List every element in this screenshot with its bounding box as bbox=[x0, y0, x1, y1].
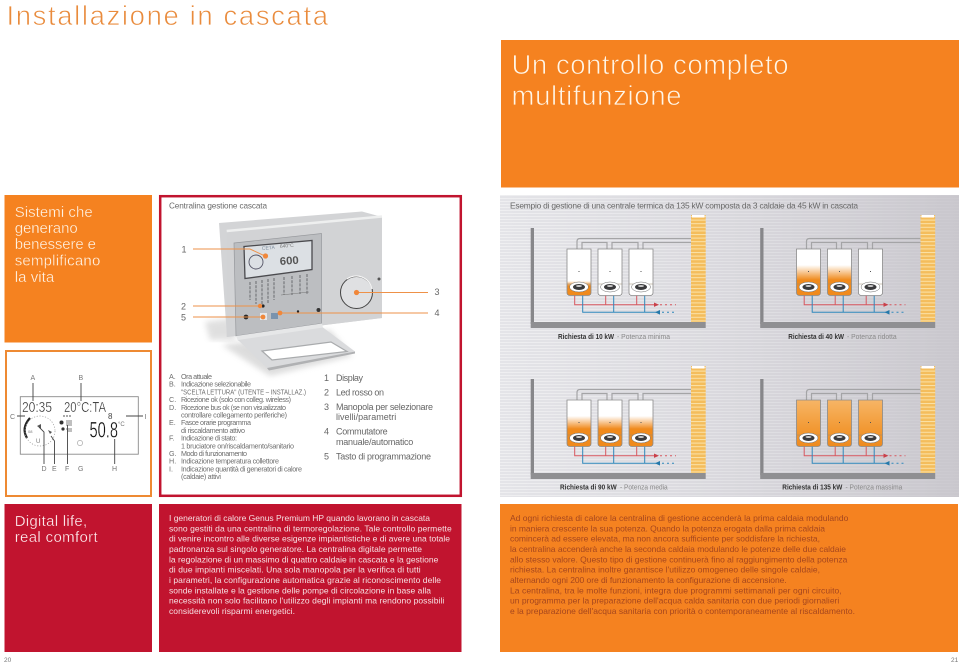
image: controller: 600 bbox=[279, 255, 299, 268]
legend: letters A to I bbox=[169, 372, 306, 481]
legend: letters A to I: di riscaldamento attivo bbox=[181, 426, 245, 435]
LCD callout letters: C bbox=[10, 414, 15, 421]
legend: letters A to I: E. bbox=[169, 418, 176, 427]
legend: letters A to I: F. bbox=[169, 434, 175, 443]
legend: letters A to I: Indicazione di stato: bbox=[181, 434, 237, 443]
heading: slogan: generano bbox=[15, 220, 78, 237]
panel: LCD display diagram bbox=[6, 351, 151, 496]
callouts: numbered leaders: 5 bbox=[181, 312, 186, 322]
panel: red slogan bbox=[4, 504, 152, 652]
panel: cascade schemes bbox=[500, 195, 959, 497]
scheme: 90 kW: Richiesta di 90 kW bbox=[560, 482, 617, 491]
text block: generatori: padronanza sul singolo generatore. La centralina digitale permette bbox=[169, 544, 422, 554]
scheme: 40 kW: Richiesta di 40 kW bbox=[788, 332, 845, 341]
LCD symbols: 08 bbox=[28, 429, 33, 434]
scheme: 40 kW: - Potenza ridotta bbox=[847, 332, 897, 341]
title: Installazione in cascata bbox=[6, 0, 329, 31]
legend: letters A to I: Indicazione temperatura collettore bbox=[181, 457, 279, 466]
scheme: 135 kW: Richiesta di 135 kW bbox=[782, 482, 843, 491]
legend: letters A to I: I. bbox=[169, 464, 173, 473]
scheme: 135 kW bbox=[760, 366, 935, 491]
text block: generatori: considerevoli risparmi energetici. bbox=[169, 606, 295, 616]
scheme: 10 kW: Richiesta di 10 kW bbox=[558, 332, 615, 341]
legend: letters A to I: A. bbox=[169, 372, 176, 381]
legend: letters A to I: C. bbox=[169, 395, 176, 404]
legend: letters A to I: H. bbox=[169, 457, 176, 466]
panel: red body text bbox=[159, 504, 462, 652]
label: controller title: Centralina gestione cascata bbox=[169, 202, 267, 210]
LCD symbols: U bbox=[36, 439, 40, 445]
LCD symbols bbox=[25, 416, 83, 446]
LCD digits: 20:35 bbox=[22, 399, 52, 416]
legend: numbers 1 to 5: 2 bbox=[324, 387, 329, 397]
legend: letters A to I: Ricezione bus ok (se non visualizzato bbox=[181, 403, 286, 412]
legend: letters A to I: Indicazione quantità di generatori di calore bbox=[181, 464, 302, 473]
legend: numbers 1 to 5 bbox=[324, 373, 433, 461]
text block: generatori: di venire incontro alle diverse esigenze impiantistiche e di avere una totale bbox=[169, 534, 450, 544]
scheme: 40 kW bbox=[760, 215, 935, 341]
legend: numbers 1 to 5: 3 bbox=[324, 402, 329, 412]
legend: numbers 1 to 5: Led rosso on bbox=[336, 387, 384, 397]
legend: letters A to I: Ora attuale bbox=[181, 372, 212, 381]
image: controller: CETA bbox=[262, 245, 276, 252]
LCD digits bbox=[22, 399, 125, 442]
LCD callout letters bbox=[10, 375, 146, 473]
LCD digits: 50.8 bbox=[90, 418, 118, 442]
heading: digital life: Digital life, bbox=[15, 513, 87, 530]
heading: controllo: Un controllo completo bbox=[512, 49, 788, 80]
legend: letters A to I: 1 bruciatore on/riscaldamento/sanitario bbox=[181, 441, 294, 450]
text block: richiesta di calore: la centralina accenderà anche la seconda caldaia modulando le potenze delle due caldaie bbox=[510, 544, 846, 554]
text block: generatori: necessità non solo facilitano l'utilizzo degli impianti ma rendono possibili bbox=[169, 596, 444, 606]
legend: numbers 1 to 5: 1 bbox=[324, 373, 329, 383]
LCD callout letters: G bbox=[78, 466, 83, 473]
LCD callout letters: A bbox=[30, 375, 36, 382]
panel: orange body text bbox=[500, 504, 958, 652]
panel: orange slogan bbox=[4, 195, 152, 342]
text block: richiesta di calore: alternando ogni 200 ore di funzionamento la configurazione di accensione. bbox=[510, 575, 787, 585]
LCD callout letters: E bbox=[52, 466, 57, 473]
LCD callout letters: D bbox=[42, 466, 47, 473]
text block: richiesta di calore: allo stesso valore. Questo tipo di gestione continuerà fino al raggiungimento della potenza bbox=[510, 554, 848, 564]
panel: red frame controller bbox=[160, 196, 461, 496]
image: controller: 640°C bbox=[280, 243, 294, 250]
LCD screen outline bbox=[20, 397, 138, 454]
legend: letters A to I: Ricezione ok (solo con colleg. wireless) bbox=[181, 395, 291, 404]
legend: letters A to I: B. bbox=[169, 380, 176, 389]
scheme: 90 kW bbox=[531, 366, 706, 491]
legend: letters A to I: controllare collegamento periferiche) bbox=[181, 410, 287, 420]
legend: letters A to I: "SCELTA LETTURA" (UTENTE – INSTALLAZ.) bbox=[181, 387, 306, 396]
legend: numbers 1 to 5: 5 bbox=[324, 451, 329, 461]
legend: numbers 1 to 5: livelli/parametri bbox=[336, 412, 396, 422]
legend: letters A to I: G. bbox=[169, 449, 177, 458]
text block: richiesta di calore: comincerà ad essere elevata, ma non ancora sufficiente per soddisfare la richiesta, bbox=[510, 534, 820, 544]
legend: numbers 1 to 5: manuale/automatico bbox=[336, 437, 413, 447]
heading: slogan bbox=[15, 204, 100, 286]
scheme: 10 kW: - Potenza minima bbox=[617, 332, 671, 341]
legend: letters A to I: D. bbox=[169, 403, 176, 412]
heading: slogan: Sistemi che bbox=[15, 204, 93, 221]
LCD callout letters: B bbox=[78, 375, 84, 382]
legend: numbers 1 to 5: Manopola per selezionare bbox=[336, 402, 433, 412]
heading: slogan: semplificano bbox=[15, 252, 100, 270]
text block: richiesta di calore: e la preparazione dell'acqua sanitaria con priorità o contemporaneamente al riscaldamento. bbox=[510, 606, 855, 616]
legend: numbers 1 to 5: Commutatore bbox=[336, 427, 388, 437]
text block: generatori: I generatori di calore Genus Premium HP quando lavorano in cascata bbox=[169, 513, 430, 523]
heading: slogan: benessere e bbox=[15, 236, 96, 253]
legend: numbers 1 to 5: Display bbox=[336, 373, 364, 383]
text block: richiesta di calore: richiesta. La centralina inoltre garantisce l'utilizzo omogeneo delle singole caldaie, bbox=[510, 565, 820, 575]
text block: richiesta di calore: Ad ogni richiesta di calore la centralina di gestione accenderà la prima caldaia modulando bbox=[510, 513, 849, 523]
scheme: 90 kW: - Potenza media bbox=[620, 482, 668, 491]
label: scheme title: Esempio di gestione di una centrale termica da 135 kW composta da 3 caldaie da 45 kW in cascata bbox=[510, 200, 858, 210]
callouts: numbered leaders: 2 bbox=[181, 302, 186, 312]
text block: richiesta di calore: in maniera crescente la sua potenza. Quando la potenza erogata dalla prima caldaia bbox=[510, 523, 825, 533]
legend: letters A to I: Indicazione selezionabile bbox=[181, 380, 251, 389]
scheme: 135 kW: - Potenza massima bbox=[846, 482, 903, 491]
heading: digital life: real comfort bbox=[15, 529, 99, 546]
legend: numbers 1 to 5: Tasto di programmazione bbox=[336, 451, 431, 461]
LCD callout letters: H bbox=[112, 466, 117, 473]
text block: richiesta di calore bbox=[510, 513, 855, 616]
text block: richiesta di calore: La centralina, tra le molte funzioni, integra due programmi settimanali per ogni circuito, bbox=[510, 585, 842, 595]
heading: digital life bbox=[15, 513, 99, 546]
text block: generatori: di due impianti miscelati. Una sola manopola per la verifica di tutti bbox=[169, 565, 421, 575]
text block: generatori: sono gestiti da una centralina di termoregolazione. Tale controllo permette bbox=[169, 523, 452, 533]
text block: generatori: la regolazione di un massimo di quattro caldaie in cascata e la gestione bbox=[169, 554, 439, 564]
callouts: numbered leaders: 4 bbox=[434, 308, 440, 318]
panel: top orange heading bbox=[501, 40, 959, 188]
LCD digits: 8 bbox=[108, 412, 113, 421]
heading: controllo bbox=[512, 49, 788, 111]
text block: generatori: sonde installate e la gestione delle pompe di circolazione in base alla bbox=[169, 585, 431, 595]
legend: letters A to I: Fasce orarie programma bbox=[181, 418, 251, 427]
callouts: numbered leaders bbox=[181, 244, 440, 322]
image: controller bbox=[205, 212, 382, 376]
LCD callout lines bbox=[17, 383, 143, 464]
text block: richiesta di calore: un programma per la preparazione dell'acqua calda sanitaria con due periodi giornalieri bbox=[510, 596, 839, 606]
LCD callout letters: F bbox=[65, 466, 69, 473]
heading: slogan: la vita bbox=[15, 269, 55, 286]
scheme: 10 kW bbox=[531, 215, 706, 341]
text block: generatori bbox=[169, 513, 452, 616]
heading: controllo: multifunzione bbox=[512, 80, 682, 111]
callouts: numbered leaders: 1 bbox=[182, 244, 187, 254]
callouts: numbered leaders: 3 bbox=[434, 287, 440, 297]
LCD callout letters: I bbox=[144, 414, 146, 421]
legend: letters A to I: Modo di funzionamento bbox=[181, 449, 247, 458]
LCD digits: °C bbox=[118, 422, 125, 428]
LCD digits: 20°C:TA bbox=[64, 399, 106, 416]
text block: generatori: i parametri, la configurazione automatica grazie al riconoscimento delle bbox=[169, 575, 441, 585]
legend: numbers 1 to 5: 4 bbox=[324, 427, 329, 437]
legend: letters A to I: (caldaie) attivi bbox=[181, 472, 221, 481]
